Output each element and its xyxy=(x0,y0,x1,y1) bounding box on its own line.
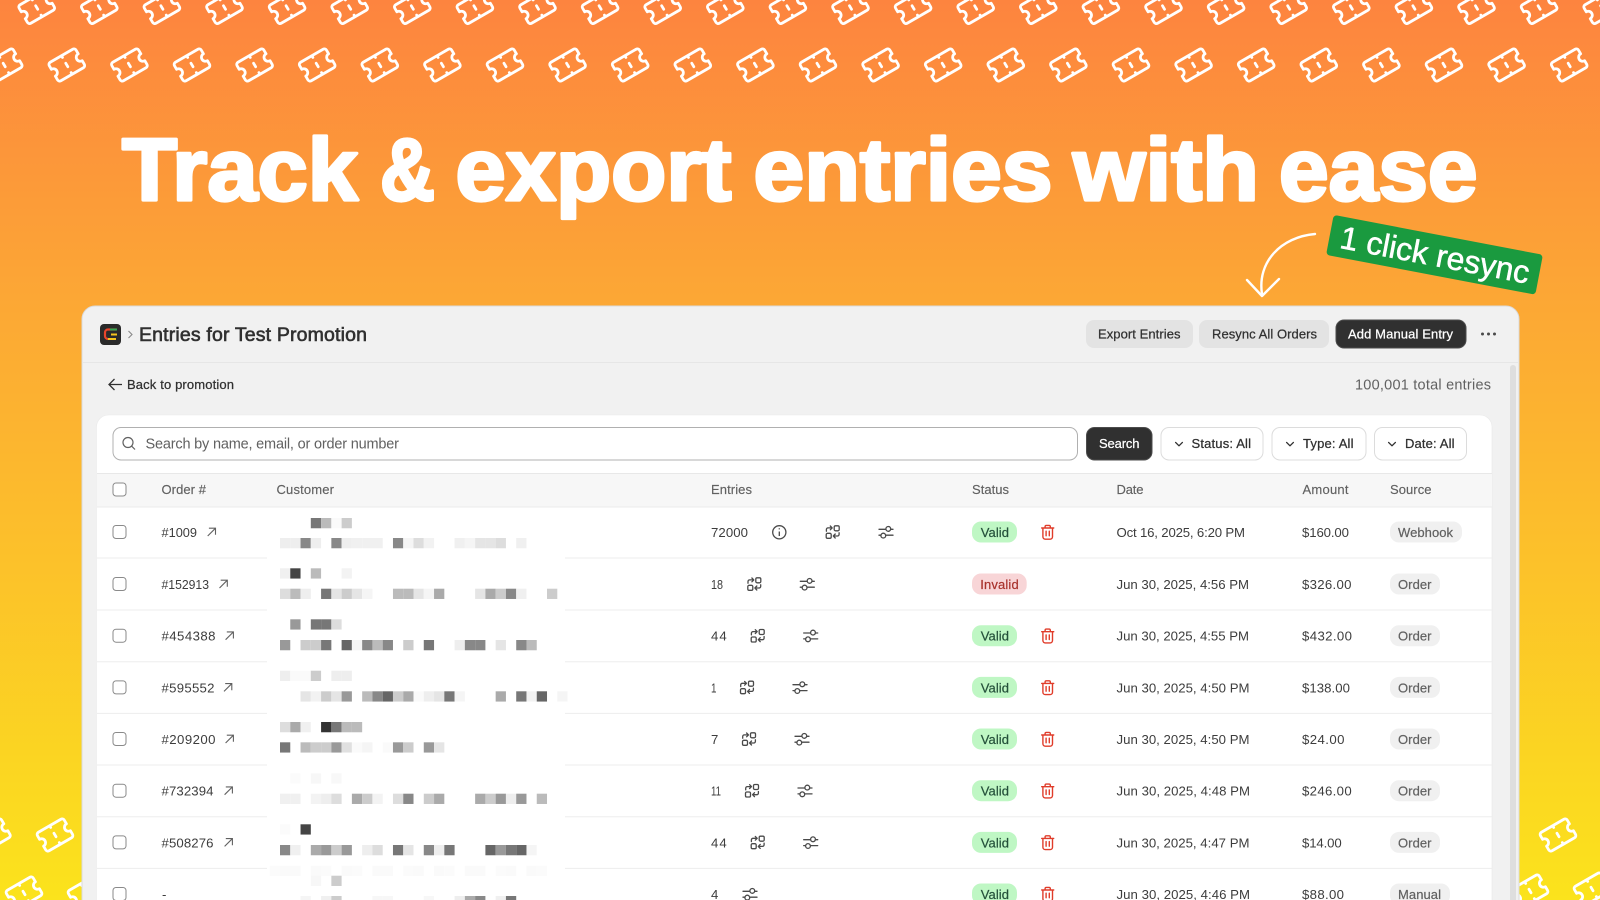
status pill: valid: Valid xyxy=(981,680,1009,695)
source pill: order xyxy=(1390,625,1440,646)
total entries count: 100,001 total entries xyxy=(1355,378,1491,394)
status pill: valid: Valid xyxy=(981,525,1009,540)
pixelated customer details xyxy=(270,518,568,900)
source pill: order: Order xyxy=(1398,680,1432,695)
filter: date: Date: All xyxy=(1405,436,1455,451)
row: order 152913: Jun 30, 2025, 4:56 PM xyxy=(1116,577,1249,592)
table header row: Amount xyxy=(1302,482,1349,497)
page heading: Entries for Test Promotion xyxy=(139,324,367,346)
row: order 732394 xyxy=(113,780,1440,801)
title: Track xyxy=(122,120,359,219)
table header row: Order # xyxy=(162,482,207,497)
status pill: valid: Valid xyxy=(981,784,1009,799)
filter: type xyxy=(1272,428,1366,460)
row: order 454388: Jun 30, 2025, 4:55 PM xyxy=(1116,629,1249,644)
row: order 732394: #732394 xyxy=(162,784,214,799)
status pill: valid xyxy=(972,677,1017,698)
source pill: order: Order xyxy=(1398,784,1432,799)
status pill: valid: Valid xyxy=(981,629,1009,644)
table header row: Customer xyxy=(276,482,335,497)
row: order 209200: $24.00 xyxy=(1302,732,1344,747)
source pill: manual xyxy=(1390,884,1450,900)
title: & xyxy=(380,120,435,219)
table header row: Source xyxy=(1390,482,1432,497)
row: order 454388: #454388 xyxy=(162,629,216,644)
search input xyxy=(113,428,1078,460)
ticket pattern: bottom right xyxy=(1511,818,1600,900)
status pill: valid xyxy=(972,522,1017,542)
button: add manual entry xyxy=(1336,320,1466,348)
button: export entries xyxy=(1086,320,1193,348)
row: order 209200: 7 xyxy=(711,732,718,747)
row: order 508276: 44 xyxy=(711,835,727,850)
search input: Search by name, email, or order number xyxy=(146,436,399,452)
row dividers xyxy=(97,558,1492,868)
source pill: order: Order xyxy=(1398,835,1432,850)
row: order 1009: 72000 xyxy=(711,525,748,540)
filter: type: Type: All xyxy=(1303,436,1354,451)
row: order 209200 xyxy=(113,728,1440,750)
source pill: order xyxy=(1390,677,1440,698)
status pill: valid xyxy=(972,780,1017,801)
row: order 454388: $432.00 xyxy=(1302,629,1352,644)
button: resync all orders xyxy=(1199,320,1329,348)
back link: Back to promotion xyxy=(127,377,234,392)
row: manual entry xyxy=(113,884,1450,900)
status pill: valid: Valid xyxy=(981,835,1009,850)
source pill: order: Order xyxy=(1398,629,1432,644)
row: order 1009 xyxy=(113,522,1462,542)
filter: date xyxy=(1374,428,1466,460)
row: order 152913: $326.00 xyxy=(1302,577,1352,592)
status pill: valid: Valid xyxy=(981,732,1009,747)
callout: 1 click resync: 1 click resync xyxy=(1337,219,1533,291)
status pill: valid xyxy=(972,728,1017,750)
filter: status xyxy=(1161,428,1263,460)
ticket pattern: top rows xyxy=(0,0,1600,82)
row: order 732394: 11 xyxy=(711,784,721,799)
table header row: Status xyxy=(972,482,1010,497)
row: order 152913 xyxy=(113,574,1440,594)
table header row xyxy=(97,473,1492,508)
status pill: valid xyxy=(972,832,1017,853)
filter: status: Status: All xyxy=(1192,436,1251,451)
panel: app window xyxy=(82,306,1519,900)
row: order 508276: Jun 30, 2025, 4:47 PM xyxy=(1116,835,1250,850)
table header row: Entries xyxy=(711,482,752,497)
status pill: invalid: Invalid xyxy=(980,577,1019,592)
title: with xyxy=(1072,120,1259,219)
source pill: order: Order xyxy=(1398,577,1432,592)
status pill: valid xyxy=(972,625,1017,646)
title: ease xyxy=(1279,120,1478,219)
source pill: order xyxy=(1390,832,1440,853)
row: order 595552: #595552 xyxy=(162,680,214,695)
source pill: webhook xyxy=(1390,522,1462,542)
breadcrumb chevron xyxy=(128,331,132,338)
source pill: order xyxy=(1390,728,1440,750)
row: order 508276: $14.00 xyxy=(1302,835,1342,850)
title: entries xyxy=(754,120,1052,219)
icon: more menu xyxy=(1481,332,1496,336)
button: add manual entry: Add Manual Entry xyxy=(1348,326,1454,342)
row: order 732394: $246.00 xyxy=(1302,784,1352,799)
row: order 454388 xyxy=(113,625,1440,646)
row: order 1009: $160.00 xyxy=(1302,525,1349,540)
scrollbar xyxy=(1510,365,1516,900)
row: order 209200: #209200 xyxy=(162,732,216,747)
row: order 732394: Jun 30, 2025, 4:48 PM xyxy=(1116,784,1250,799)
row: order 595552 xyxy=(113,677,1440,698)
row: order 1009: #1009 xyxy=(162,525,197,540)
row: order 152913: #152913 xyxy=(162,577,209,592)
status pill: valid xyxy=(972,884,1017,900)
row: order 508276: #508276 xyxy=(162,835,214,850)
row: order 595552: 1 xyxy=(711,680,716,695)
row: order 454388: 44 xyxy=(711,629,727,644)
status pill: invalid xyxy=(972,574,1027,594)
title: export xyxy=(456,120,732,219)
ticket pattern: bottom left xyxy=(0,818,105,900)
row: order 508276 xyxy=(113,832,1440,853)
source pill: order xyxy=(1390,574,1440,594)
button: search: Search xyxy=(1099,436,1140,451)
source pill: order: Order xyxy=(1398,732,1432,747)
row: order 1009: Oct 16, 2025, 6:20 PM xyxy=(1116,525,1245,540)
arrow: callout to resync button xyxy=(1247,234,1315,296)
source pill: webhook: Webhook xyxy=(1398,525,1454,540)
button: export entries: Export Entries xyxy=(1098,326,1181,342)
icon: info xyxy=(773,526,786,539)
button: search xyxy=(1086,428,1152,460)
row: order 209200: Jun 30, 2025, 4:50 PM xyxy=(1116,732,1250,747)
button: resync all orders: Resync All Orders xyxy=(1212,326,1318,342)
panel: entries table card xyxy=(96,415,1492,900)
header divider line xyxy=(83,362,1518,363)
row: order 152913: 18 xyxy=(711,577,723,592)
row: order 595552: $138.00 xyxy=(1302,680,1350,695)
icon: app logo xyxy=(100,324,121,345)
table header row: Date xyxy=(1116,482,1144,497)
row: order 595552: Jun 30, 2025, 4:50 PM xyxy=(1116,680,1250,695)
source pill: order xyxy=(1390,780,1440,801)
